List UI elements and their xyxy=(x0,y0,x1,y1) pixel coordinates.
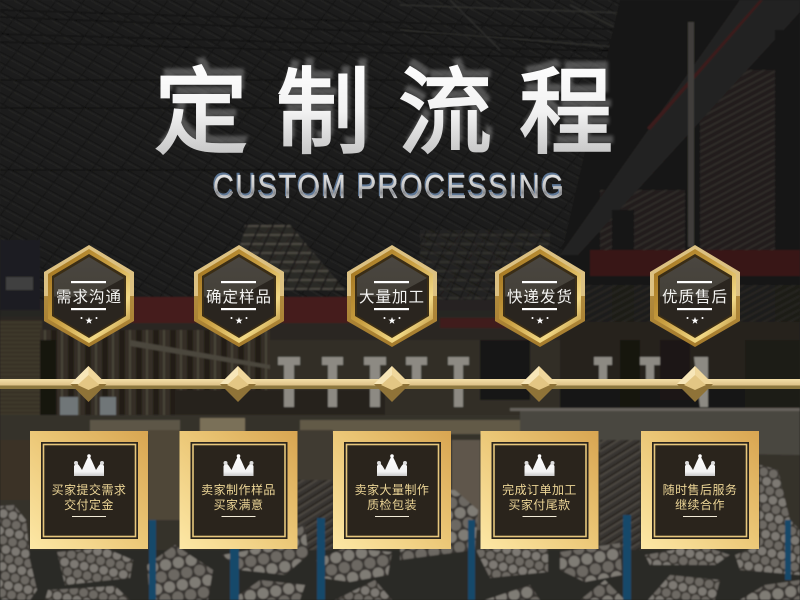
step 1: badge 需求沟通 xyxy=(44,245,134,347)
step 5: badge 优质售后: 优质售后 xyxy=(662,288,728,306)
card 1: 买家提交需求 交付定金: 买家提交需求 xyxy=(52,482,126,497)
step 2: badge 确定样品 xyxy=(194,245,284,347)
card 5: 随时售后服务 继续合作: 继续合作 xyxy=(675,497,725,512)
step 3: badge 大量加工 xyxy=(347,245,437,347)
timeline marker 5 xyxy=(677,366,713,402)
card 4: 完成订单加工 买家付尾款: 买家付尾款 xyxy=(508,497,571,512)
card 4: 完成订单加工 买家付尾款 xyxy=(480,431,598,549)
card 3: 卖家大量制作 质检包装: 卖家大量制作 xyxy=(355,482,429,497)
card 3: 卖家大量制作 质检包装 xyxy=(333,431,451,549)
card 2: 卖家制作样品 买家满意: 卖家制作样品 xyxy=(201,482,276,497)
card 1: 买家提交需求 交付定金: 交付定金 xyxy=(64,497,114,512)
card 5: 随时售后服务 继续合作 xyxy=(641,431,759,549)
timeline marker 3 xyxy=(374,366,410,402)
timeline marker 4 xyxy=(521,366,557,402)
title: 定制流程: 流 xyxy=(401,52,495,157)
card 2: 卖家制作样品 买家满意 xyxy=(180,431,298,549)
timeline bar xyxy=(0,379,800,389)
title: 定制流程 xyxy=(154,52,616,165)
title: 定制流程: 流 xyxy=(398,60,492,165)
title: 定制流程: 程 xyxy=(519,60,613,165)
card 5: 随时售后服务 继续合作: 随时售后服务 xyxy=(663,482,737,497)
card 3: 卖家大量制作 质检包装: 质检包装 xyxy=(367,497,417,512)
step 4: badge 快递发货 xyxy=(495,245,585,347)
subtitle: CUSTOM PROCESSING: CUSTOM PROCESSING xyxy=(212,166,564,203)
card 2: 卖家制作样品 买家满意: 买家满意 xyxy=(214,497,263,512)
timeline marker 2 xyxy=(220,366,256,402)
title: 定制流程: 定 xyxy=(154,60,248,165)
card 1: 买家提交需求 交付定金 xyxy=(30,431,148,549)
card 4: 完成订单加工 买家付尾款: 完成订单加工 xyxy=(502,482,577,497)
step 1: badge 需求沟通: 需求沟通 xyxy=(56,288,122,306)
title: 定制流程: 制 xyxy=(276,60,370,165)
step 2: badge 确定样品: 确定样品 xyxy=(206,288,272,306)
subtitle: CUSTOM PROCESSING: CUSTOM PROCESSING xyxy=(213,168,565,205)
title: 定制流程: 制 xyxy=(279,52,373,157)
title: 定制流程: 定 xyxy=(157,52,251,157)
timeline marker 1 xyxy=(70,366,106,402)
step 4: badge 快递发货: 快递发货 xyxy=(507,288,573,306)
title: 定制流程: 程 xyxy=(522,52,616,157)
step 5: badge 优质售后 xyxy=(650,245,740,347)
step 3: badge 大量加工: 大量加工 xyxy=(359,288,425,306)
